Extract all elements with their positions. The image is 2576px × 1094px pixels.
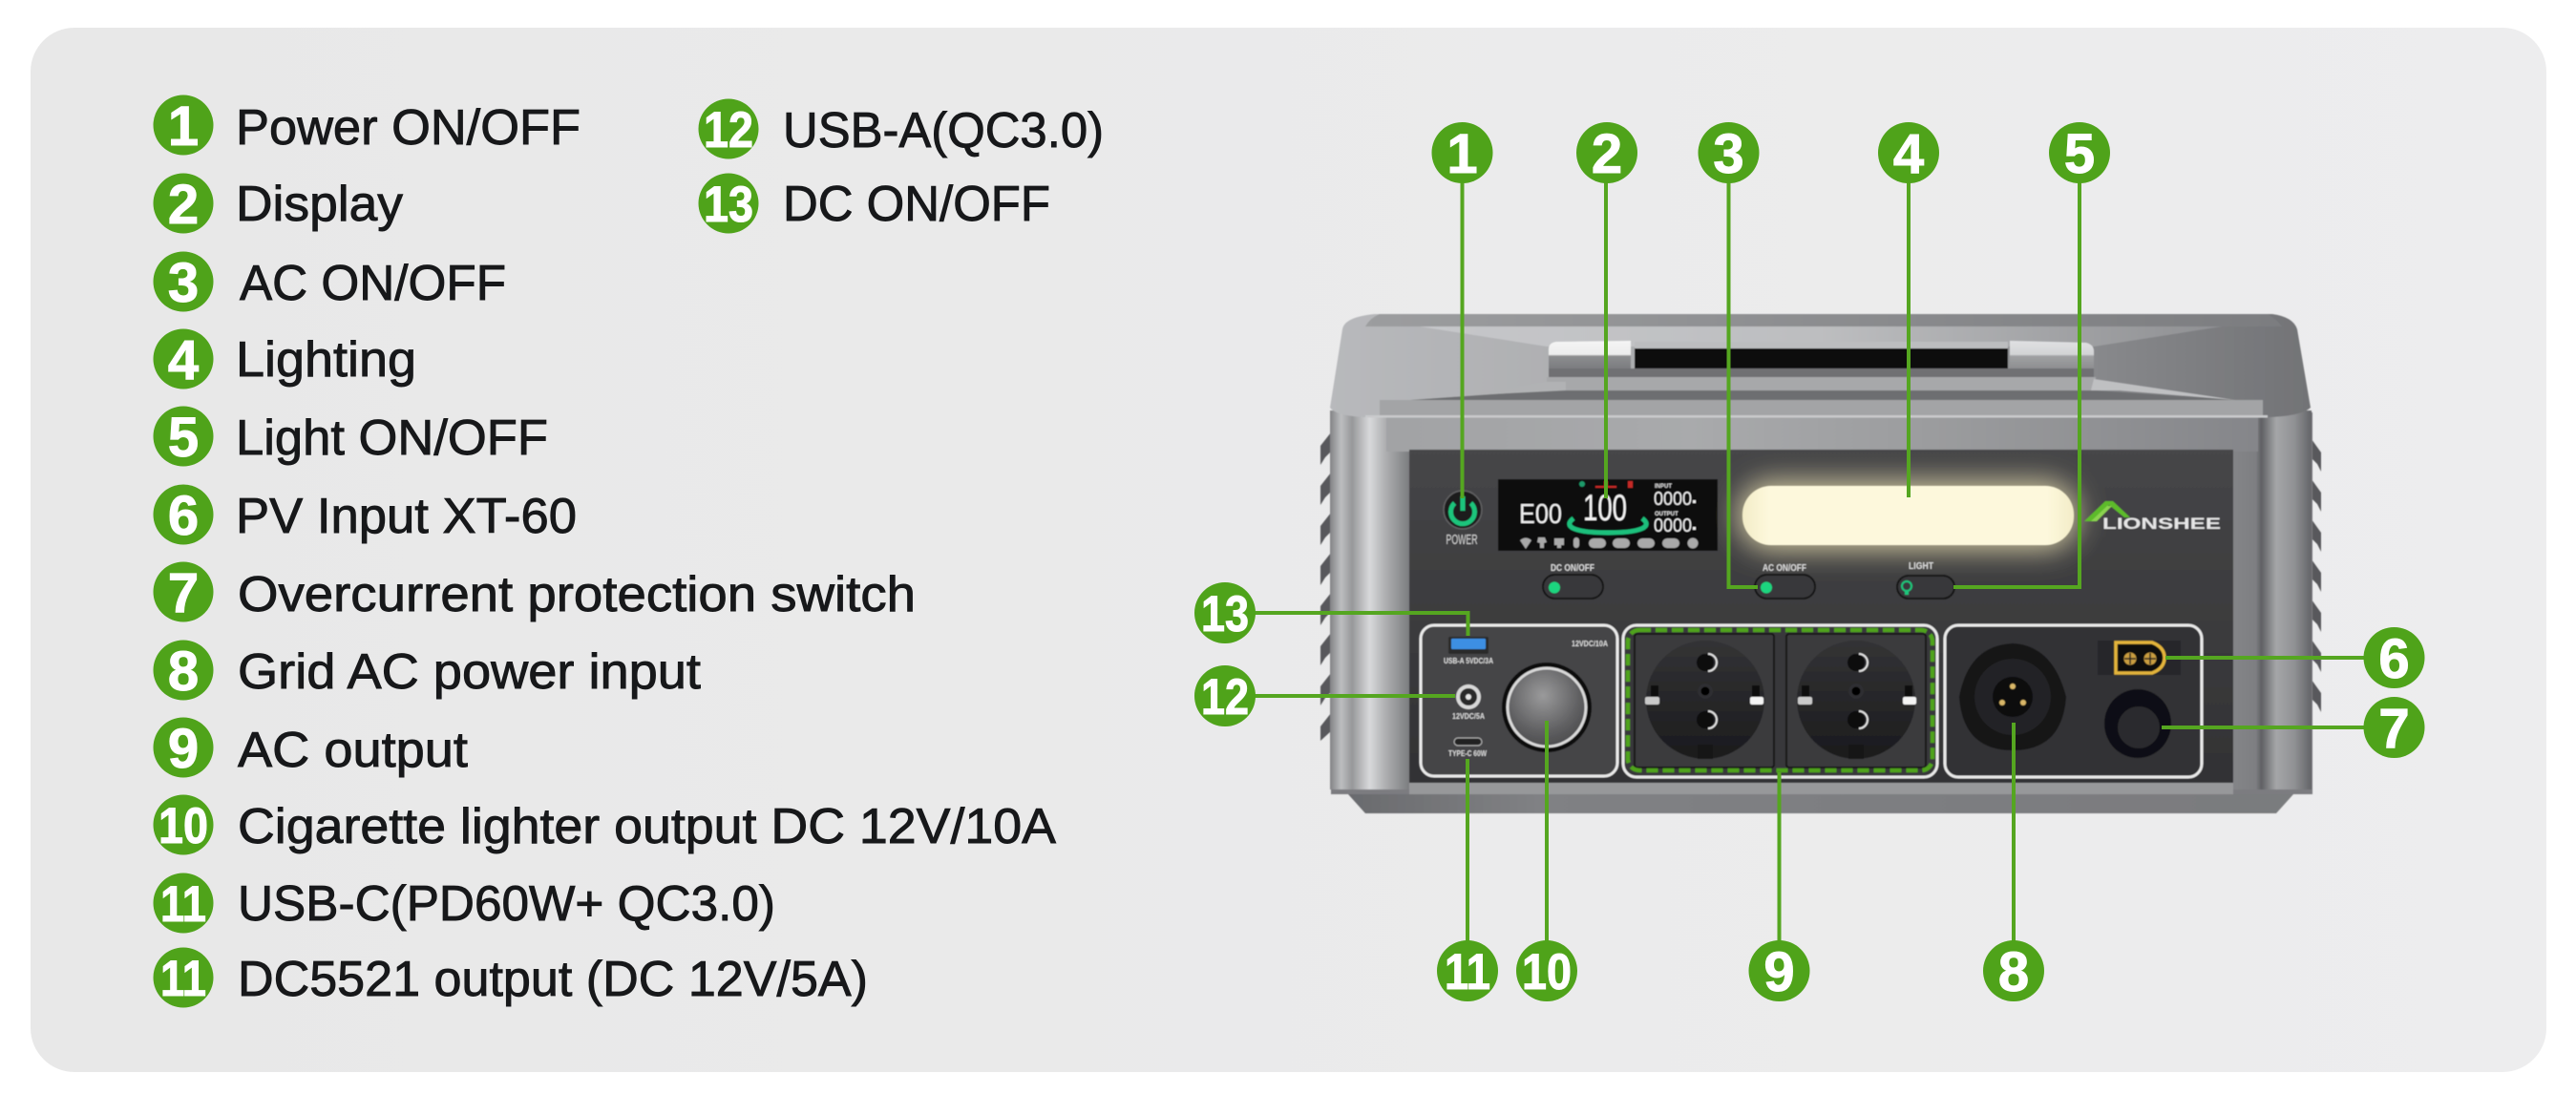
legend item 8: 8 [168, 641, 199, 703]
power button: POWER [1446, 532, 1478, 548]
LCD display: INPUT [1655, 484, 1672, 490]
LCD display: 0000 [1654, 489, 1692, 510]
battery ring [1570, 518, 1646, 533]
legend item 3: AC ON/OFF [240, 256, 506, 311]
legend item 1: Power ON/OFF [236, 100, 581, 156]
callout 3: 3 [1713, 123, 1744, 185]
leader lines [1225, 153, 2394, 971]
callout 9: 9 [1763, 941, 1795, 1003]
top indicators [1579, 481, 1633, 488]
body front frame [1330, 410, 2312, 813]
legend item 11 DC5521: 11 [160, 951, 206, 1007]
AC button: AC ON/OFF [1763, 563, 1806, 574]
legend item 2: 2 [168, 174, 199, 236]
legend item 13: DC ON/OFF [783, 177, 1050, 232]
legend item 5: Light ON/OFF [236, 410, 548, 466]
LCD display: E00 [1519, 499, 1562, 530]
callout 13: 13 [1201, 586, 1249, 642]
legend item 11 DC5521: DC5521 output (DC 12V/5A) [238, 952, 868, 1007]
legend item 13: 13 [704, 177, 753, 233]
callout 4: 4 [1893, 123, 1924, 185]
callout 10: 10 [1522, 944, 1572, 1000]
callout 6: 6 [2378, 628, 2410, 690]
cigarette lighter socket [1502, 639, 1608, 752]
legend item 7: 7 [168, 562, 199, 624]
legend item 1: 1 [168, 95, 199, 158]
legend item 9: AC output [238, 723, 469, 778]
legend item 12: 12 [704, 102, 753, 158]
callout 8: 8 [1998, 941, 2029, 1003]
callout 5: 5 [2064, 123, 2095, 185]
front control panel [1409, 450, 2233, 783]
legend item 4 [153, 328, 416, 391]
USB-C port [1448, 738, 1488, 758]
callout 2 [1576, 122, 1637, 185]
callout 12: 12 [1201, 669, 1249, 726]
callout 4 [1878, 122, 1939, 185]
legend item 10: 10 [158, 798, 208, 854]
LCD display: OUTPUT [1655, 512, 1679, 517]
legend: numbered list of parts [153, 95, 1104, 1008]
legend item 11 USB-C: USB-C(PD60W+ QC3.0) [238, 876, 775, 932]
overcurrent switch [2104, 689, 2171, 758]
legend item 9 [153, 718, 469, 780]
callout 2: 2 [1592, 123, 1622, 185]
legend item 5: 5 [168, 407, 199, 469]
socket left [1635, 634, 1774, 768]
USB-C port: TYPE-C 60W [1448, 748, 1488, 758]
callout 8 [1983, 940, 2044, 1003]
callout 7: 7 [2378, 698, 2410, 760]
callout 9 [1749, 940, 1810, 1003]
port group: inputs [1945, 625, 2202, 777]
legend item 4: 4 [168, 329, 199, 391]
port group: DC and USB [1421, 625, 1617, 776]
DC jack: 12VDC/5A [1452, 711, 1485, 721]
XT-60 connector [2098, 641, 2181, 675]
LCD display [1498, 479, 1718, 551]
light button: LIGHT [1909, 561, 1933, 572]
LCD display: 100 [1583, 488, 1627, 529]
callout 11: 11 [1445, 944, 1490, 1000]
DC button [1543, 563, 1603, 599]
product: power station [1320, 314, 2321, 813]
legend item 2 [153, 174, 403, 236]
USB-A port: USB-A 5VDC/3A [1444, 656, 1493, 665]
carrying handle [1549, 341, 2094, 377]
side fins [1320, 432, 2321, 741]
lid [1330, 314, 2311, 418]
legend item 7: Overcurrent protection switch [238, 567, 916, 622]
legend item 12: USB-A(QC3.0) [783, 103, 1104, 158]
LCD display: 0000 [1654, 515, 1692, 536]
legend item 4: Lighting [236, 332, 416, 388]
dashed highlight [1628, 630, 1932, 770]
logo [2084, 501, 2221, 533]
callout 6 [2364, 627, 2425, 690]
grid AC inlet [1959, 643, 2066, 750]
status icons [1520, 537, 1698, 549]
cigarette lighter socket: 12VDC/10A [1572, 639, 1608, 648]
AC button [1755, 563, 1815, 599]
legend item 8: Grid AC power input [238, 644, 702, 700]
legend item 13 [699, 174, 1050, 233]
light button [1897, 561, 1954, 599]
callout 1 [1432, 122, 1493, 185]
callout 7 [2364, 697, 2425, 760]
DC button: DC ON/OFF [1551, 563, 1594, 574]
logo: LIONSHEE [2102, 515, 2221, 533]
legend item 6: PV Input XT-60 [236, 489, 577, 544]
port group: AC sockets [1623, 625, 1937, 777]
callout 5 [2049, 122, 2110, 185]
legend item 10: Cigarette lighter output DC 12V/10A [238, 799, 1056, 854]
socket right [1786, 634, 1926, 768]
power button [1444, 491, 1482, 548]
legend item 9: 9 [168, 718, 199, 780]
legend item 11 USB-C: 11 [160, 876, 206, 933]
legend item 3: 3 [168, 252, 199, 314]
LED light bar [1738, 481, 2079, 550]
USB-A port [1444, 637, 1493, 665]
callout 3 [1698, 122, 1759, 185]
DC jack [1452, 684, 1485, 721]
legend item 5 [153, 407, 548, 469]
legend item 2: Display [236, 177, 403, 232]
legend item 3 [153, 252, 506, 314]
legend item 6: 6 [168, 485, 199, 547]
callout 1: 1 [1446, 123, 1478, 185]
